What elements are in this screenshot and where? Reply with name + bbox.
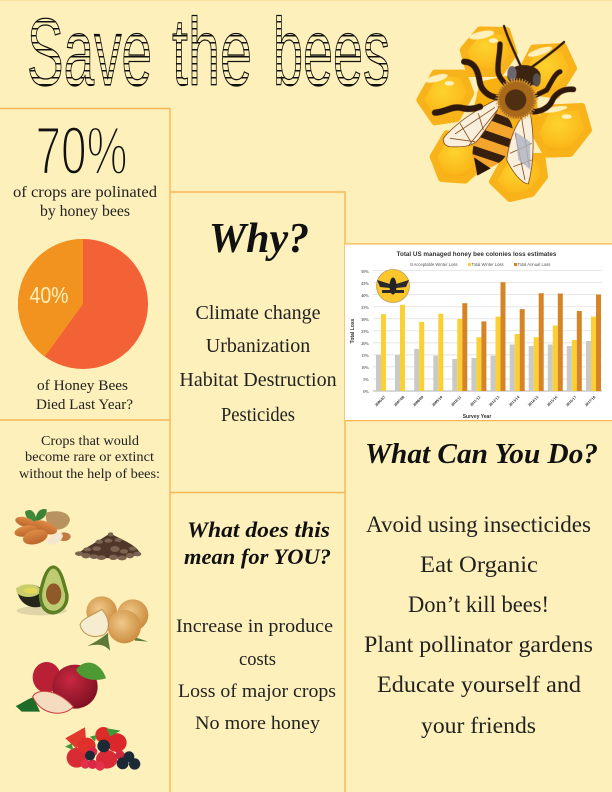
comb centre — [472, 75, 540, 153]
legend — [410, 262, 550, 267]
causes list — [179, 302, 337, 426]
icon: coffee beans — [75, 532, 141, 560]
actions list: your friends — [421, 713, 536, 738]
x axis labels: 2012/13 — [488, 395, 500, 407]
panel: what can you do — [364, 438, 598, 738]
panel: 70% stat — [13, 113, 157, 220]
pie caption — [36, 378, 133, 413]
title: the — [172, 0, 252, 106]
pie caption: Died Last Year? — [36, 397, 133, 413]
x axis labels: 2011/12 — [469, 395, 481, 407]
y axis labels: 40% — [361, 293, 369, 298]
panel: crops heading: Crops that would — [41, 433, 139, 448]
icon: berries — [65, 727, 140, 771]
panel: crops heading — [19, 433, 160, 481]
x axis labels: 2006/07 — [374, 395, 386, 407]
panel: crops heading: become rare or extinct — [25, 449, 154, 464]
actions list: Educate yourself and — [377, 672, 582, 697]
icon: bee on honeycomb — [420, 26, 588, 198]
causes list: Urbanization — [206, 335, 310, 357]
gridlines — [373, 271, 602, 379]
legend: Total Annual Loss — [518, 262, 550, 267]
orange bars — [462, 282, 601, 391]
y axis labels: 15% — [361, 353, 369, 358]
y axis labels: 20% — [361, 341, 369, 346]
y axis labels: 25% — [361, 329, 369, 334]
title: Save — [27, 0, 152, 106]
pie caption: of Honey Bees — [37, 378, 128, 394]
actions list: Plant pollinator gardens — [364, 632, 593, 657]
panel: what does this mean — [176, 517, 336, 734]
head — [507, 65, 541, 87]
actions list: Eat Organic — [420, 552, 538, 577]
grey bars — [376, 341, 591, 391]
x axis labels: 2009/10 — [431, 395, 443, 407]
panel: why — [179, 216, 337, 426]
y axis labels: 50% — [361, 269, 369, 274]
panel: 70% stat: by honey bees — [40, 203, 130, 220]
consequences list — [176, 616, 336, 734]
causes list: Habitat Destruction — [179, 369, 337, 391]
title — [27, 0, 390, 106]
heading: Why? — [209, 216, 309, 262]
panel: what does this mean: mean for YOU? — [184, 544, 331, 569]
x axis labels — [374, 395, 596, 407]
y axis labels: 30% — [361, 317, 369, 322]
x axis labels: 2016/17 — [565, 395, 577, 407]
x axis labels: 2014/15 — [527, 395, 539, 407]
y axis labels: 0% — [363, 389, 369, 394]
abdomen — [472, 110, 513, 168]
thorax — [497, 80, 536, 119]
icon: avocado — [16, 565, 69, 615]
y axis labels: 35% — [361, 305, 369, 310]
legs — [435, 26, 573, 113]
icon: apples — [16, 662, 106, 713]
causes list: Climate change — [196, 302, 321, 324]
panel: crops heading: without the help of bees: — [19, 466, 160, 481]
x axis labels: 2015/16 — [546, 395, 558, 407]
x axis labels: 2008/09 — [412, 395, 424, 407]
icon: crops — [13, 509, 148, 771]
x axis labels: 2010/11 — [450, 395, 462, 407]
consequences list: costs — [239, 649, 276, 670]
caption: of crops are polinated — [13, 184, 157, 201]
title: bees — [273, 0, 390, 106]
x axis labels: 2017/18 — [584, 395, 596, 407]
icon: almonds — [13, 509, 71, 547]
x axis labels: 2007/08 — [393, 395, 405, 407]
y axis title: Total Loss — [350, 318, 356, 343]
actions list — [364, 512, 593, 738]
big number: 70% — [36, 113, 128, 189]
actions list: Don’t kill bees! — [408, 592, 549, 617]
chart title: Total US managed honey bee colonies loss estimates — [397, 251, 557, 258]
y axis labels — [361, 269, 369, 394]
actions list: Avoid using insecticides — [366, 512, 591, 537]
x axis labels: 2013/14 — [508, 395, 520, 407]
icon: onions — [80, 596, 148, 651]
legend: Acceptable Winter Loss — [414, 262, 458, 267]
consequences list: Loss of major crops — [178, 681, 336, 702]
consequences list: No more honey — [195, 713, 321, 734]
heading: What does this — [187, 517, 330, 542]
icon: bee logo — [376, 270, 410, 302]
legend: Total Winter Loss — [472, 262, 504, 267]
wings — [443, 97, 533, 184]
consequences list: Increase in produce — [176, 616, 333, 637]
y axis labels: 45% — [361, 281, 369, 286]
causes list: Pesticides — [221, 404, 295, 426]
comb highlights — [425, 29, 572, 119]
pie chart: 40% — [30, 282, 68, 308]
x axis title: Survey Year — [463, 414, 491, 420]
y axis labels: 5% — [363, 377, 369, 382]
heading: What Can You Do? — [365, 438, 598, 470]
panel: chart — [345, 244, 612, 420]
pie chart — [18, 239, 148, 369]
y axis labels: 10% — [361, 365, 369, 370]
yellow bars — [381, 305, 596, 391]
honeycomb cells — [420, 30, 588, 198]
